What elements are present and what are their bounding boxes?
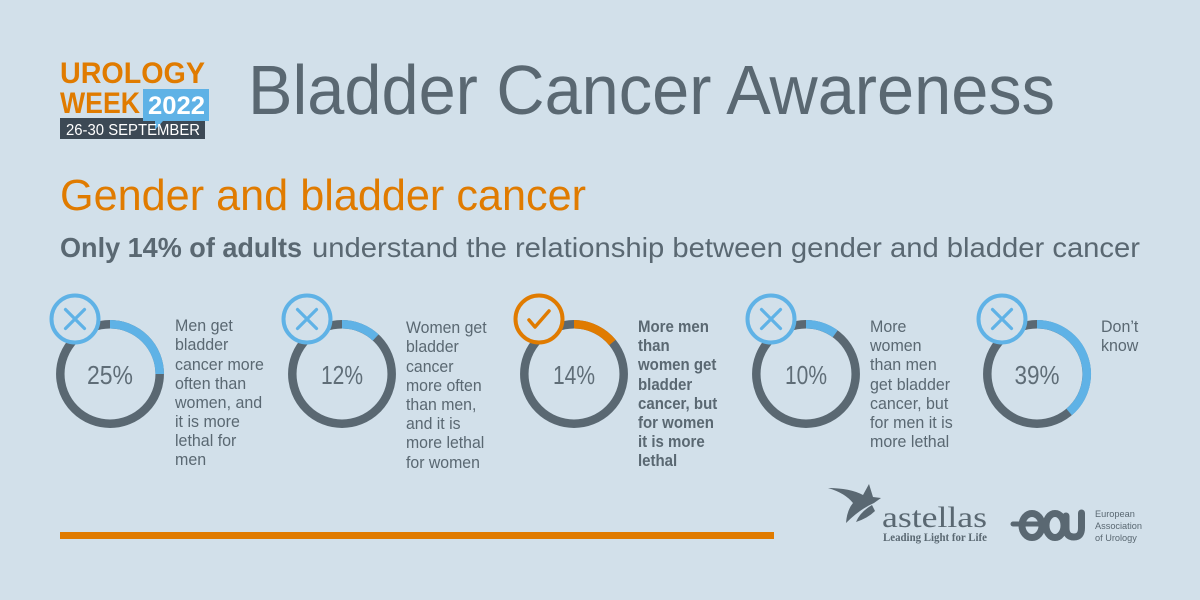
icon: check (516, 296, 562, 342)
icon: cross (978, 296, 1026, 342)
caption: more often (406, 377, 482, 395)
caption: for women (638, 414, 714, 432)
caption: men (175, 451, 206, 469)
caption: for men it is (870, 414, 953, 432)
caption: women, and (174, 394, 262, 412)
caption: cancer (406, 358, 454, 376)
caption: More men (638, 318, 709, 336)
logo: European Association of Urology (1013, 509, 1142, 543)
caption: More (870, 318, 906, 336)
caption: Women get (406, 319, 487, 337)
title: Bladder Cancer Awareness (248, 51, 1055, 129)
panel: 10 percent (748, 296, 953, 451)
caption: Men get (175, 317, 233, 335)
caption: it is more (638, 433, 705, 451)
heading: gender and bladder cancer: Gender and bladder cancer (60, 171, 586, 220)
caption: and it is (406, 415, 461, 433)
caption: it is more (175, 413, 240, 431)
donut chart: 39% (987, 324, 1087, 424)
caption: get bladder (870, 376, 951, 394)
donut chart: 12% (292, 324, 392, 424)
caption: bladder (175, 336, 229, 354)
subheading: Only 14% of adults (60, 232, 302, 263)
panel: 39 percent (978, 296, 1139, 424)
value: 25% (87, 360, 133, 390)
logo: astellas: Leading Light for Life (883, 532, 987, 544)
value: 39% (1014, 360, 1060, 390)
logo: Urology Week 2022: WEEK (60, 87, 140, 120)
panel: 12 percent (284, 296, 487, 472)
caption: lethal for (175, 432, 237, 450)
caption: cancer, but (638, 395, 718, 413)
caption: cancer, but (870, 395, 949, 413)
logo: European Association of Urology: of Urology (1095, 533, 1137, 543)
icon: cross (284, 296, 330, 342)
caption: than men (870, 356, 937, 374)
donut chart: 25% (60, 324, 160, 424)
logo: Urology Week 2022: 26-30 SEPTEMBER (66, 122, 200, 139)
panel: 25 percent (52, 296, 264, 469)
logo: Urology Week 2022 (60, 57, 209, 139)
orange rule (60, 532, 774, 539)
logo: European Association of Urology: Association (1095, 521, 1142, 531)
caption: Don’t (1101, 318, 1139, 336)
caption: bladder (638, 376, 692, 394)
caption: more lethal (870, 433, 949, 451)
logo: astellas (828, 484, 987, 544)
icon: cross (52, 296, 98, 342)
icon: cross (748, 296, 794, 342)
value: 10% (785, 360, 827, 390)
logo: astellas: astellas (882, 501, 987, 534)
caption: lethal (638, 452, 677, 470)
value: 12% (321, 360, 363, 390)
donut chart: 14% (524, 324, 624, 424)
caption: than (638, 337, 670, 355)
caption: for women (406, 454, 480, 472)
panel: 14 percent (correct answer) (516, 296, 718, 470)
caption: bladder (406, 338, 459, 356)
caption: than men, (406, 396, 476, 414)
caption: more lethal (406, 434, 484, 452)
caption: know (1101, 337, 1139, 355)
value: 14% (553, 360, 595, 390)
logo: European Association of Urology: European (1095, 509, 1135, 519)
caption: cancer more (175, 356, 264, 374)
caption: women get (637, 356, 717, 374)
subheading: understand the relationship between gender and bladder cancer (312, 232, 1140, 263)
caption: often than (175, 375, 246, 393)
logo: Urology Week 2022: 2022 (148, 92, 205, 120)
donut chart: 10% (756, 324, 856, 424)
caption: women (869, 337, 922, 355)
logo: Urology Week 2022: UROLOGY (60, 57, 205, 90)
